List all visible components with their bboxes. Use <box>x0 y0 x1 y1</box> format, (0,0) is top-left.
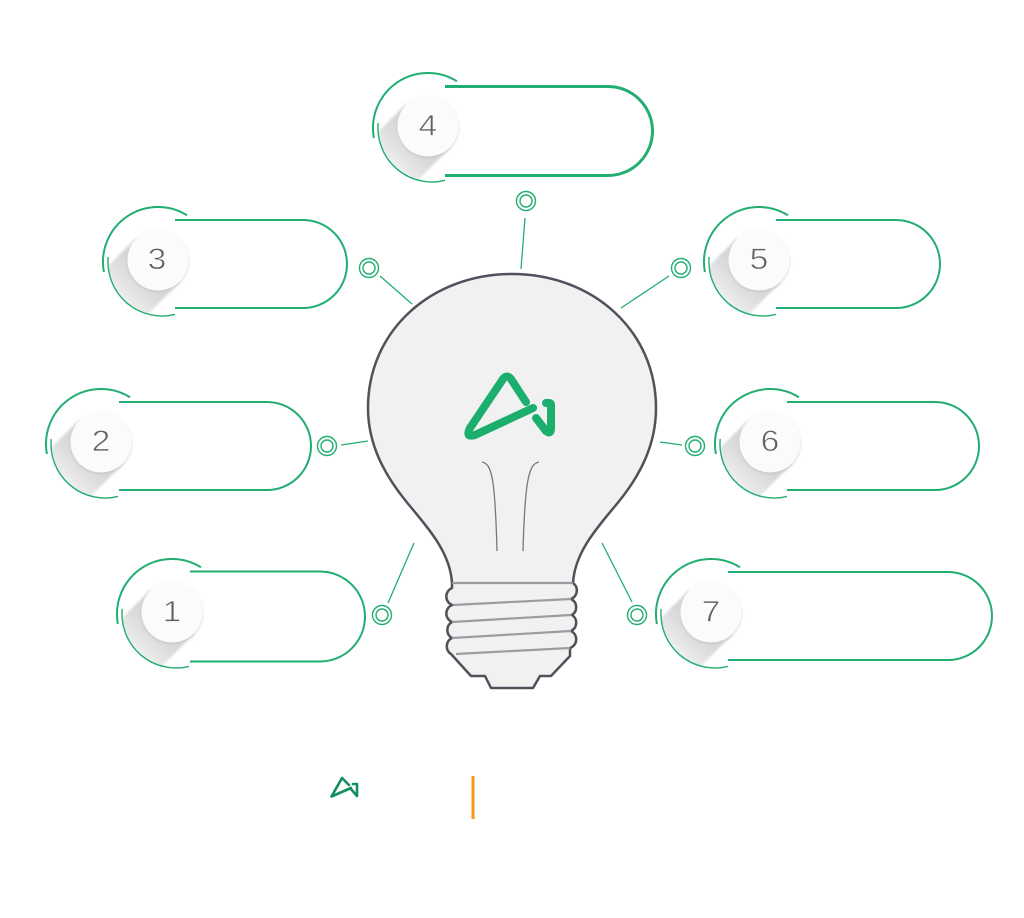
card 7 <box>649 559 992 674</box>
connector 3 <box>360 258 412 304</box>
card 7: 7 <box>702 594 720 628</box>
connector 4 <box>516 192 536 269</box>
card 2: 2 <box>92 424 110 458</box>
footer divider <box>472 776 474 819</box>
connector 2 <box>318 436 368 456</box>
card 1: 1 <box>163 594 181 628</box>
card 5 <box>697 207 940 322</box>
connector 5 <box>621 258 690 308</box>
card 3: 3 <box>148 242 166 276</box>
icon: logo in bulb <box>468 376 551 436</box>
card 4: 4 <box>419 108 437 142</box>
card 3 <box>96 207 347 322</box>
icon: footer logo <box>332 778 357 796</box>
filaments <box>482 462 539 551</box>
card 5: 5 <box>750 242 768 276</box>
card 4 <box>366 73 652 188</box>
card 6 <box>708 389 979 504</box>
light bulb <box>368 274 656 688</box>
connector 1 <box>372 543 414 624</box>
card 1 <box>110 559 365 674</box>
screw threads <box>452 583 573 654</box>
card 6: 6 <box>761 424 779 458</box>
card 2 <box>39 389 311 504</box>
connector 6 <box>660 436 704 456</box>
bulb outline <box>368 274 656 688</box>
connector 7 <box>602 543 646 624</box>
